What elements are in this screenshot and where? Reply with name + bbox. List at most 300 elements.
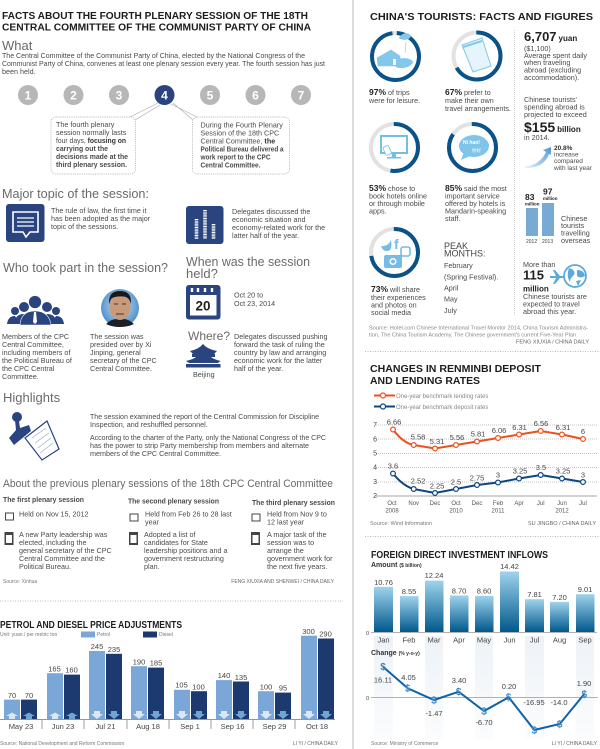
source line bbox=[369, 326, 589, 346]
axis labels: Sep 16 bbox=[221, 722, 244, 731]
column: third session bbox=[251, 498, 335, 571]
panel: petrol and diesel bbox=[0, 620, 339, 747]
stat: daily spending: Average spent daily bbox=[524, 51, 587, 60]
data labels bbox=[387, 418, 585, 490]
panel: foreign direct investment bbox=[366, 550, 598, 747]
stat: 115 million: million bbox=[523, 284, 549, 294]
stat: 115 million: More than bbox=[523, 260, 555, 269]
change values: -6.70 bbox=[475, 718, 493, 727]
callout: left: The fourth plenary bbox=[56, 120, 115, 129]
legend: Unit: yuan / per metric ton bbox=[0, 632, 57, 638]
source line bbox=[3, 579, 335, 585]
text: 53 percent bbox=[369, 183, 427, 216]
change values: 3.40 bbox=[452, 676, 466, 685]
heading: when: held? bbox=[186, 266, 218, 281]
dollar markers: $ bbox=[405, 684, 411, 694]
stat: 115 million: Chinese tourists are bbox=[523, 292, 587, 301]
callout: left: third plenary session. bbox=[56, 160, 127, 169]
stat: 115 million: 115 bbox=[523, 268, 544, 282]
dollar markers: $ bbox=[506, 692, 512, 704]
source line: FENG XIUXIA AND SHENWEI / CHINA DAILY bbox=[231, 579, 335, 585]
bar values bbox=[8, 627, 332, 700]
column: third session: 12 last year bbox=[267, 518, 305, 526]
data labels: 5.81 bbox=[471, 430, 485, 438]
panel: fourth plenary session facts bbox=[2, 11, 335, 585]
bar values: 290 bbox=[319, 630, 332, 638]
column: first session: A new Party leadership was bbox=[19, 530, 108, 539]
month labels: Jun bbox=[503, 636, 516, 644]
data labels: 3.6 bbox=[388, 462, 398, 470]
text: members: Central Committee, bbox=[2, 340, 64, 349]
column: second session: government restructuring bbox=[144, 554, 224, 563]
month labels: Apr bbox=[453, 636, 465, 644]
axis labels: May 23 bbox=[9, 722, 33, 731]
ring: 97 percent leisure bbox=[370, 31, 421, 82]
bar chart: amount: 0 bbox=[366, 631, 369, 637]
text: what description: been held. bbox=[2, 67, 36, 76]
bar values: 245 bbox=[91, 642, 103, 651]
source line: LI YI / CHINA DAILY bbox=[293, 741, 339, 747]
source line bbox=[370, 521, 596, 527]
chart: tourists overseas: 83 bbox=[525, 192, 535, 202]
change values: -16.95 bbox=[523, 698, 545, 707]
arrows bbox=[6, 711, 332, 719]
text: delegates pushing bbox=[234, 332, 328, 373]
bar values: 7.81 bbox=[527, 590, 542, 599]
line chart: 3 bbox=[373, 479, 377, 486]
column: second session: Adopted a list of bbox=[144, 530, 196, 539]
column: first session: Central Committee and the bbox=[19, 554, 105, 563]
stat: 115 million: expected to travel bbox=[523, 300, 580, 308]
line chart: 4 bbox=[373, 464, 377, 472]
text: presided: The session was bbox=[90, 332, 144, 341]
axis labels bbox=[9, 722, 328, 731]
text: presided: secretary of the CPC bbox=[90, 356, 157, 365]
title: CHANGES IN RENMINBI DEPOSIT bbox=[370, 364, 541, 375]
source line: LI YI / CHINA DAILY bbox=[552, 741, 598, 747]
stat: spending abroad: in 2014. bbox=[524, 133, 550, 142]
bar values: 8.60 bbox=[477, 586, 491, 596]
numbered session circles: 6 bbox=[252, 88, 259, 102]
text: 73 percent bbox=[371, 284, 426, 317]
text: economic situation: latter half of the year. bbox=[232, 231, 299, 240]
line chart: 2 bbox=[373, 493, 377, 500]
text: highlights: Inspection, and reshuffled personnel. bbox=[90, 420, 208, 429]
column: first session bbox=[3, 495, 112, 571]
title: CHINA'S TOURISTS: FACTS AND FIGURES bbox=[370, 12, 593, 23]
column: first session: Held on Nov 15, 2012 bbox=[19, 510, 89, 518]
text: economic situation bbox=[232, 207, 325, 240]
callout: left bbox=[51, 103, 197, 174]
axis labels: 2012 bbox=[555, 508, 569, 514]
legend bbox=[0, 632, 173, 638]
text: 85 percent: Mandarin-speaking bbox=[445, 206, 506, 216]
axis labels: Jun 23 bbox=[52, 722, 74, 731]
callout: right: Central Committee, the bbox=[200, 136, 275, 146]
month labels: Jul bbox=[530, 636, 540, 644]
column: second session: leadership positions and a bbox=[144, 546, 228, 555]
line chart: 7 bbox=[373, 422, 377, 429]
title: AND LENDING RATES bbox=[370, 376, 480, 387]
source line: tion, The China Tourism Academy, The Chinese government's current Five-Year Plan bbox=[369, 332, 576, 338]
callout: right: Political Bureau delivered a bbox=[200, 144, 284, 154]
data labels: 6.31 bbox=[512, 423, 527, 432]
bar values: 8.55 bbox=[402, 587, 416, 596]
data labels: 3 bbox=[496, 470, 500, 480]
heading: major topic: Major topic of the session: bbox=[2, 186, 149, 201]
bar values: 8.70 bbox=[452, 586, 466, 596]
text: highlights: has the power to strip Party membership from members and alternate bbox=[90, 441, 309, 450]
axis labels: Dec bbox=[430, 501, 440, 507]
axis labels: Apr bbox=[514, 501, 524, 507]
stat: spending abroad: $155 billion bbox=[524, 119, 581, 135]
data labels: 6.06 bbox=[492, 426, 506, 435]
change values bbox=[374, 673, 591, 727]
column: third session: government work for bbox=[267, 554, 333, 563]
heading: previous sessions: About the previous plenary sessions of the 18th CPC Central Committee bbox=[3, 478, 333, 490]
text: presided: Central Committee. bbox=[90, 364, 152, 373]
heading: who took part: Who took part in the session? bbox=[3, 260, 168, 275]
source line: Source: Wind Information bbox=[370, 521, 432, 527]
axis labels: Jul bbox=[579, 501, 587, 507]
line chart: 6 bbox=[373, 436, 377, 444]
change values: -14.0 bbox=[550, 698, 568, 707]
change values: 4.05 bbox=[401, 673, 416, 682]
text: peak months: February bbox=[444, 261, 473, 270]
dollar markers: $ bbox=[481, 706, 487, 718]
title: FOREIGN DIRECT INVESTMENT INFLOWS bbox=[371, 550, 548, 561]
source line: FENG XIUXIA / CHINA DAILY bbox=[516, 340, 589, 346]
numbered session circles: 7 bbox=[298, 88, 305, 102]
data labels: 3 bbox=[581, 470, 585, 480]
change values: 1.90 bbox=[577, 679, 591, 688]
column: second session: Held from Feb 26 to 28 last bbox=[145, 510, 232, 518]
text: tourists overseas bbox=[561, 214, 591, 245]
data labels: 6.56 bbox=[534, 419, 548, 428]
icon: Tiananmen gate bbox=[186, 344, 220, 368]
numbered session circles: 5 bbox=[207, 88, 214, 102]
column: first session: Political Bureau. bbox=[19, 562, 71, 571]
column: second session: plan. bbox=[144, 562, 160, 571]
ring: 53 percent bbox=[371, 124, 418, 171]
text: what description: The Central Committee of the Communist Party of China, elected by the National Congress of the bbox=[2, 51, 305, 60]
data labels: 6.66 bbox=[387, 418, 401, 426]
text: members: Members of the CPC bbox=[2, 332, 69, 341]
axis labels: Jul 21 bbox=[95, 722, 116, 731]
text: 53 percent: apps. bbox=[369, 206, 387, 216]
bar values: 10.76 bbox=[374, 578, 393, 587]
column: third session: Held from Nov 9 to bbox=[267, 510, 327, 518]
bar values bbox=[374, 562, 592, 602]
icon: coin stacks bbox=[186, 206, 224, 244]
series: deposit rates bbox=[391, 471, 585, 495]
text: highlights bbox=[90, 412, 326, 458]
stat: daily spending: ($1,100) bbox=[524, 44, 551, 53]
bar values: 235 bbox=[108, 645, 120, 654]
text: 85 percent: staff. bbox=[445, 214, 460, 223]
stat: spending abroad bbox=[524, 95, 587, 142]
icon: group of people bbox=[7, 296, 64, 325]
icon: speech bubble bbox=[6, 204, 44, 242]
ring: 85 percent bbox=[449, 124, 496, 171]
bar values: 135 bbox=[235, 673, 247, 682]
text: increase bbox=[553, 145, 593, 172]
chart: tourists overseas bbox=[525, 186, 558, 245]
text: delegates pushing: economic work for the latter bbox=[234, 356, 323, 365]
bar values: 100 bbox=[260, 682, 272, 692]
text: increase: increase bbox=[554, 152, 579, 158]
text: 67 percent: 67% prefer to bbox=[445, 87, 491, 97]
stat: spending abroad: projected to exceed bbox=[524, 110, 587, 119]
chart: tourists overseas: million bbox=[543, 196, 558, 201]
heading: change: Change (% y-o-y) bbox=[371, 650, 420, 657]
text: 73 percent: social media bbox=[371, 308, 411, 317]
icon: calendar: 20 bbox=[195, 298, 211, 314]
stat: spending abroad: Chinese tourists' bbox=[524, 95, 578, 104]
bar values: 12.24 bbox=[425, 571, 443, 580]
legend: One-year benchmark lending rates bbox=[396, 394, 488, 400]
data labels: 6.31 bbox=[556, 423, 570, 432]
bar values: 105 bbox=[175, 680, 188, 690]
axis labels: Nov bbox=[408, 501, 419, 507]
axis labels: Aug 18 bbox=[136, 722, 160, 731]
dollar markers: $ bbox=[431, 696, 437, 706]
title bbox=[370, 364, 541, 387]
data labels: 5.31 bbox=[430, 437, 444, 446]
line chart: change bbox=[366, 662, 598, 736]
change values: 0.20 bbox=[502, 682, 516, 691]
text: members: the Political Bureau of bbox=[2, 356, 72, 365]
axis labels: Oct bbox=[451, 501, 461, 507]
axis labels: 2011 bbox=[492, 508, 505, 514]
text: rule of law: has been adopted as the major bbox=[51, 214, 151, 223]
dollar markers bbox=[380, 662, 588, 736]
column stripes bbox=[374, 636, 594, 739]
callout: left: carrying out the bbox=[56, 144, 108, 153]
text: members: including members of bbox=[2, 348, 70, 357]
text: presided bbox=[90, 332, 157, 373]
data labels: 2.52 bbox=[411, 476, 425, 486]
text: 97 percent bbox=[368, 87, 420, 105]
callout: right bbox=[192, 117, 290, 174]
dollar markers: $ bbox=[582, 690, 588, 700]
change values: 16.11 bbox=[374, 676, 392, 684]
text: tourists overseas: Chinese bbox=[561, 214, 587, 223]
text: 85 percent: 85% said the most bbox=[445, 183, 507, 193]
data labels: 3.25 bbox=[556, 466, 570, 476]
text: 67 percent bbox=[445, 87, 511, 113]
legend: One-year benchmark deposit rates bbox=[396, 405, 488, 411]
text: delegates pushing: country by law and arranging bbox=[234, 348, 326, 357]
column: second session: candidates for State bbox=[144, 538, 208, 547]
text: delegates pushing: half of the year. bbox=[234, 364, 283, 373]
callout: right: Central Committee. bbox=[200, 160, 260, 170]
axis labels: Feb bbox=[493, 501, 504, 507]
bar values: 100 bbox=[192, 682, 205, 692]
bar values: 140 bbox=[218, 671, 230, 680]
text: 53 percent: 53% chose to bbox=[369, 183, 415, 193]
data labels: 2.75 bbox=[470, 474, 484, 482]
axis labels: Dec bbox=[472, 501, 482, 507]
text: 73 percent: 73% will share bbox=[371, 284, 420, 294]
text: peak months: July bbox=[444, 306, 457, 315]
ring: 67 percent bbox=[454, 32, 500, 80]
numbered session circles: 3 bbox=[116, 88, 123, 102]
stat: daily spending: 6,707 yuan bbox=[524, 29, 577, 44]
label: Beijing: Beijing bbox=[193, 370, 215, 379]
month labels: Aug bbox=[553, 636, 566, 644]
text: what description bbox=[2, 51, 325, 76]
text: presided: presided over by Xi bbox=[90, 340, 152, 349]
bar values: 9.01 bbox=[578, 585, 592, 594]
data labels: 5.58 bbox=[411, 432, 425, 442]
month labels: Jan bbox=[377, 636, 390, 644]
text: increase: with last year bbox=[553, 165, 593, 172]
month labels: Sep bbox=[578, 636, 592, 644]
ring: 85 percent: 你好 bbox=[472, 147, 481, 154]
text: 53 percent: or through mobile bbox=[369, 199, 425, 208]
heading: when bbox=[186, 254, 310, 281]
source line: Source: Xinhua bbox=[3, 579, 37, 585]
text: peak months: PEAK bbox=[444, 241, 468, 251]
stat: daily spending bbox=[523, 29, 587, 82]
icon: stamp bbox=[9, 412, 59, 460]
text: rule of law bbox=[51, 206, 151, 231]
icon: calendar bbox=[186, 285, 220, 320]
chart: tourists overseas: 2012 bbox=[526, 239, 537, 245]
title: FACTS ABOUT THE FOURTH PLENARY SESSION OF THE 18TH bbox=[2, 11, 308, 22]
source line bbox=[0, 741, 339, 747]
text: rule of law: The rule of law, the first time it bbox=[51, 206, 146, 215]
numbered session circles: 4 bbox=[161, 88, 168, 102]
series: lending rates bbox=[391, 427, 585, 451]
axis labels bbox=[385, 501, 587, 514]
stat: spending abroad: spending abroad is bbox=[524, 102, 585, 112]
text: 67 percent: travel arrangements. bbox=[445, 104, 511, 113]
text: 67 percent: make their own bbox=[445, 96, 494, 105]
chart: tourists overseas: 2013 bbox=[542, 239, 553, 245]
text: 85 percent: offered by hotels is bbox=[445, 199, 506, 208]
text: peak months: (Spring Festival). bbox=[444, 272, 498, 282]
text: 85 percent: important service bbox=[445, 192, 500, 200]
stat: daily spending: when traveling bbox=[523, 58, 570, 67]
legend: Petrol bbox=[97, 632, 110, 638]
ring: 73 percent bbox=[371, 229, 418, 276]
panel: renminbi rates bbox=[370, 364, 597, 527]
arrow: increase bbox=[524, 147, 551, 168]
column: second session bbox=[128, 496, 232, 571]
ring: 73 percent: f bbox=[394, 236, 399, 252]
change values: -1.47 bbox=[425, 709, 443, 718]
text: 97 percent: were for leisure. bbox=[368, 96, 420, 105]
line chart: change: 0 bbox=[366, 696, 369, 702]
text: dates: Oct 20 to bbox=[234, 290, 263, 300]
text: peak months bbox=[444, 241, 498, 315]
text: 53 percent: book hotels online bbox=[369, 192, 427, 200]
callout: left: four days, focusing on bbox=[56, 136, 126, 145]
icon: plane and globe bbox=[550, 265, 586, 287]
text: economic situation: economy-related work for the bbox=[232, 223, 325, 232]
text: 73 percent: and photos on bbox=[371, 300, 417, 310]
heading: when: When was the session bbox=[186, 254, 310, 269]
bar chart: amount bbox=[366, 562, 597, 644]
text: economic situation: Delegates discussed the bbox=[232, 207, 310, 216]
stat: 115 million bbox=[523, 260, 587, 316]
column: third session: the next five years. bbox=[267, 562, 327, 571]
axis labels: Oct bbox=[387, 501, 397, 507]
stat: daily spending: abroad (excluding bbox=[524, 66, 581, 74]
column: first session: elected, including the bbox=[19, 538, 87, 547]
text: presided: Jinping, general bbox=[90, 348, 141, 357]
text: members: Committee. bbox=[2, 372, 39, 381]
bar values: 7.20 bbox=[552, 593, 567, 602]
ring: 85 percent: Ni hao! bbox=[463, 140, 480, 146]
heading: amount: Amount ($ billion) bbox=[371, 562, 422, 569]
text: peak months: MONTHS: bbox=[444, 248, 486, 258]
callout: left: session normally lasts bbox=[56, 128, 127, 137]
text: rule of law: topic of the sessions. bbox=[51, 222, 118, 231]
data labels: 6 bbox=[581, 427, 585, 436]
text: highlights: According to the charter of the Party, only the National Congress of the CPC bbox=[90, 433, 326, 442]
axis labels: Jun bbox=[557, 501, 567, 507]
text: delegates pushing: forward the task of ruling the bbox=[234, 340, 325, 349]
text: dates bbox=[234, 290, 275, 308]
text: delegates pushing: Delegates discussed pushing bbox=[234, 332, 328, 341]
axis labels: Oct 18 bbox=[306, 722, 328, 731]
panel: China's tourists bbox=[368, 12, 593, 346]
month labels: May bbox=[477, 636, 491, 644]
text: tourists overseas: overseas bbox=[561, 236, 591, 245]
data labels: 3.5 bbox=[536, 463, 546, 472]
numbered session circles: 1 bbox=[25, 88, 32, 102]
data labels: 2.25 bbox=[430, 482, 444, 490]
line chart bbox=[373, 418, 597, 514]
stat: 115 million: abroad this year. bbox=[523, 307, 576, 316]
dollar markers: $ bbox=[557, 720, 563, 730]
bar values: 300 bbox=[302, 627, 315, 636]
source line: Source: Ministry of Commerce bbox=[371, 741, 438, 747]
text: members bbox=[2, 332, 72, 381]
stat: daily spending: accommodation). bbox=[524, 73, 579, 82]
bar values: 190 bbox=[133, 658, 145, 666]
text: peak months: April bbox=[444, 284, 459, 292]
text: members: the CPC Central bbox=[2, 364, 55, 373]
bar values: 70 bbox=[8, 691, 16, 700]
callout: right: work report to the CPC bbox=[200, 152, 270, 162]
column: first session: general secretary of the CPC bbox=[19, 546, 112, 555]
column: second session: year bbox=[145, 518, 160, 526]
data labels: 3.25 bbox=[513, 466, 527, 476]
callout: right: During the Fourth Plenary bbox=[200, 120, 283, 130]
month labels: Mar bbox=[428, 636, 441, 644]
month labels: Feb bbox=[403, 636, 415, 644]
column: third session: session was to bbox=[267, 538, 314, 547]
text: economic situation: economic situation and bbox=[232, 215, 306, 224]
axis labels: 2008 bbox=[385, 508, 399, 514]
numbered session circles bbox=[18, 85, 311, 105]
column: first session: The first plenary session bbox=[3, 495, 84, 504]
line chart: 5 bbox=[373, 450, 377, 458]
source line bbox=[371, 741, 598, 747]
text: 97 percent: 97% of trips bbox=[369, 87, 410, 97]
text: dates: Oct 23, 2014 bbox=[234, 299, 275, 308]
legend: Diesel bbox=[159, 632, 173, 638]
text: highlights: The session examined the report of the Central Commission for Discipline bbox=[90, 412, 319, 421]
axis labels: 2010 bbox=[449, 508, 463, 514]
axis labels: Jul bbox=[537, 501, 545, 507]
bar values: 185 bbox=[150, 658, 162, 668]
text: 73 percent: their experiences bbox=[371, 293, 426, 302]
